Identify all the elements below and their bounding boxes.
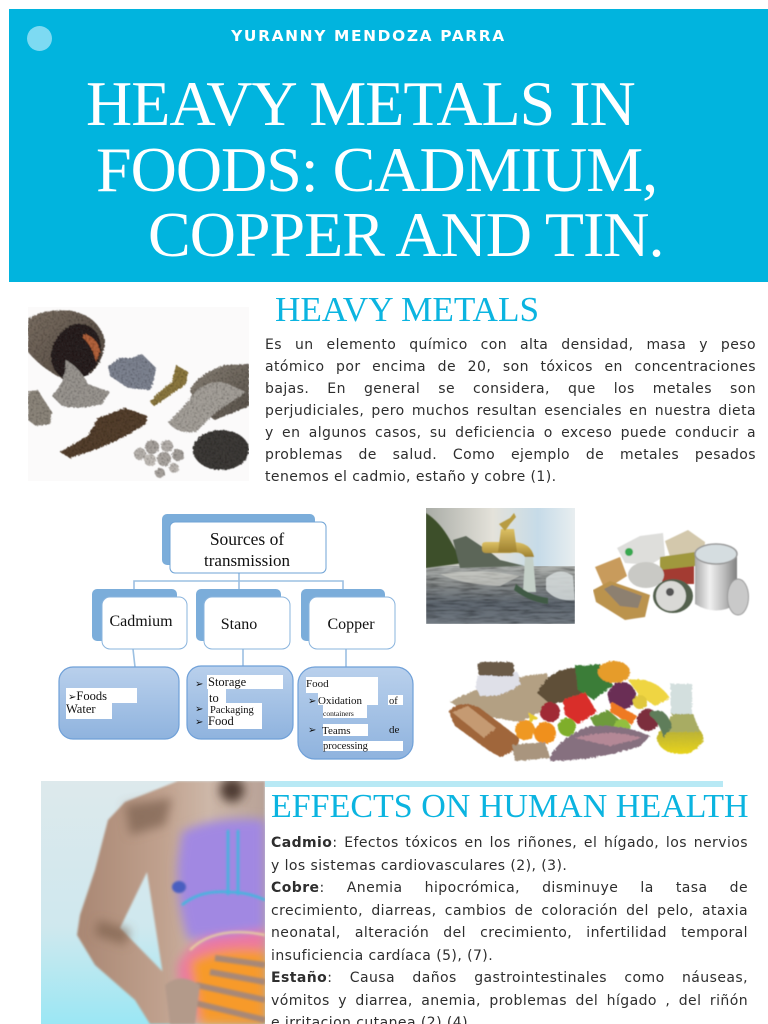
text block: effects on health: neonatal, alteración del crecimiento, infertilidad temporal — [271, 925, 748, 941]
box: copper sources: Food — [306, 678, 329, 690]
node: stano — [196, 589, 290, 649]
title — [86, 68, 663, 270]
node: stano: Stano — [221, 616, 257, 633]
text block: effects on health: crecimiento, diarreas, cambios de coloración del pelo, ataxia — [271, 902, 748, 918]
node: cadmium: Cadmium — [109, 613, 173, 630]
box: stano sources — [187, 666, 293, 739]
diagram: sources of transmission — [58, 514, 414, 760]
text block: effects on health: insuficiencia cardíaca (5), (7). — [271, 948, 493, 964]
text block: effects on health: vómitos y diarrea, anemia, problemas del hígado , del riñón — [271, 992, 748, 1008]
box: stano sources: ➢ — [195, 717, 203, 728]
node: copper — [301, 589, 395, 649]
author name: YURANNY MENDOZA PARRA — [231, 27, 506, 45]
photo: metal cans — [593, 530, 750, 621]
text block: effects on health: Estaño: Causa daños gastrointestinales como náuseas, — [271, 970, 748, 986]
text block: effects on health: Cadmio: Efectos tóxicos en los riñones, el hígado, los nervios — [271, 835, 748, 851]
box: cadmium sources — [59, 667, 179, 739]
box: copper sources: de — [389, 724, 400, 736]
box: copper sources: Oxidation — [318, 695, 362, 707]
box: cadmium sources: Water — [66, 702, 96, 716]
box: stano sources: Packaging — [210, 705, 254, 716]
heading: heavy metals: HEAVY METALS — [275, 290, 539, 329]
node: copper: Copper — [327, 616, 375, 633]
text block: heavy metals definition: atómico por encima de 20, son tóxicos en concentraciones — [265, 359, 756, 375]
box: copper sources: Teams — [322, 725, 351, 737]
box: copper sources: of — [389, 696, 398, 707]
text block: heavy metals definition: problemas de salud. Como ejemplo de metales pesados — [265, 447, 756, 463]
text block: heavy metals definition — [265, 337, 756, 485]
box: stano sources: Food — [208, 714, 234, 728]
top node — [162, 514, 326, 573]
decorative circle icon — [27, 26, 52, 51]
title: COPPER AND TIN. — [148, 199, 663, 270]
box: stano sources: Storage — [208, 675, 247, 689]
text block: effects on health — [271, 835, 748, 1024]
box: copper sources: ➢ — [308, 696, 316, 707]
box: copper sources: containers — [323, 709, 354, 718]
photo: assorted foods — [448, 660, 704, 762]
box: stano sources: ➢ — [195, 704, 203, 715]
photo: torso with digestive system — [41, 781, 265, 1024]
top node: transmission — [204, 551, 290, 570]
text block: heavy metals definition: y en algunos casos, su deficiencia o exceso puede conducir a — [265, 425, 756, 441]
box: cadmium sources: ➢Foods — [68, 689, 107, 703]
text block: heavy metals definition: tenemos el cadmio, estaño y cobre (1). — [265, 469, 557, 485]
text block: heavy metals definition: perjudiciales, pero muchos resultan esenciales en nuestra dieta — [265, 403, 756, 419]
photo: faucet over water — [426, 508, 575, 624]
text block: heavy metals definition: Es un elemento químico con alta densidad, masa y peso — [265, 337, 756, 353]
top node: Sources of — [210, 529, 284, 549]
box: stano sources: to — [209, 691, 219, 705]
shading and organs — [95, 778, 265, 1024]
photo: metal samples — [28, 308, 249, 479]
title: FOODS: CADMIUM, — [96, 134, 657, 205]
box: copper sources — [298, 667, 413, 759]
node: cadmium — [92, 589, 187, 649]
title: HEAVY METALS IN — [86, 68, 635, 139]
box: stano sources: ➢ — [195, 679, 203, 690]
text block: effects on health: Cobre: Anemia hipocrómica, disminuye la tasa de — [271, 880, 748, 896]
text block: heavy metals definition: bajas. En general se considera, que los metales son — [265, 381, 756, 397]
text block: effects on health: y los sistemas cardiovasculares (2), (3). — [271, 858, 567, 874]
banner — [9, 9, 768, 282]
box: copper sources: processing — [323, 741, 369, 752]
accent bar — [265, 781, 723, 787]
box: copper sources: ➢ — [308, 725, 316, 736]
heading: effects on human health: EFFECTS ON HUMAN HEALTH — [271, 788, 749, 825]
